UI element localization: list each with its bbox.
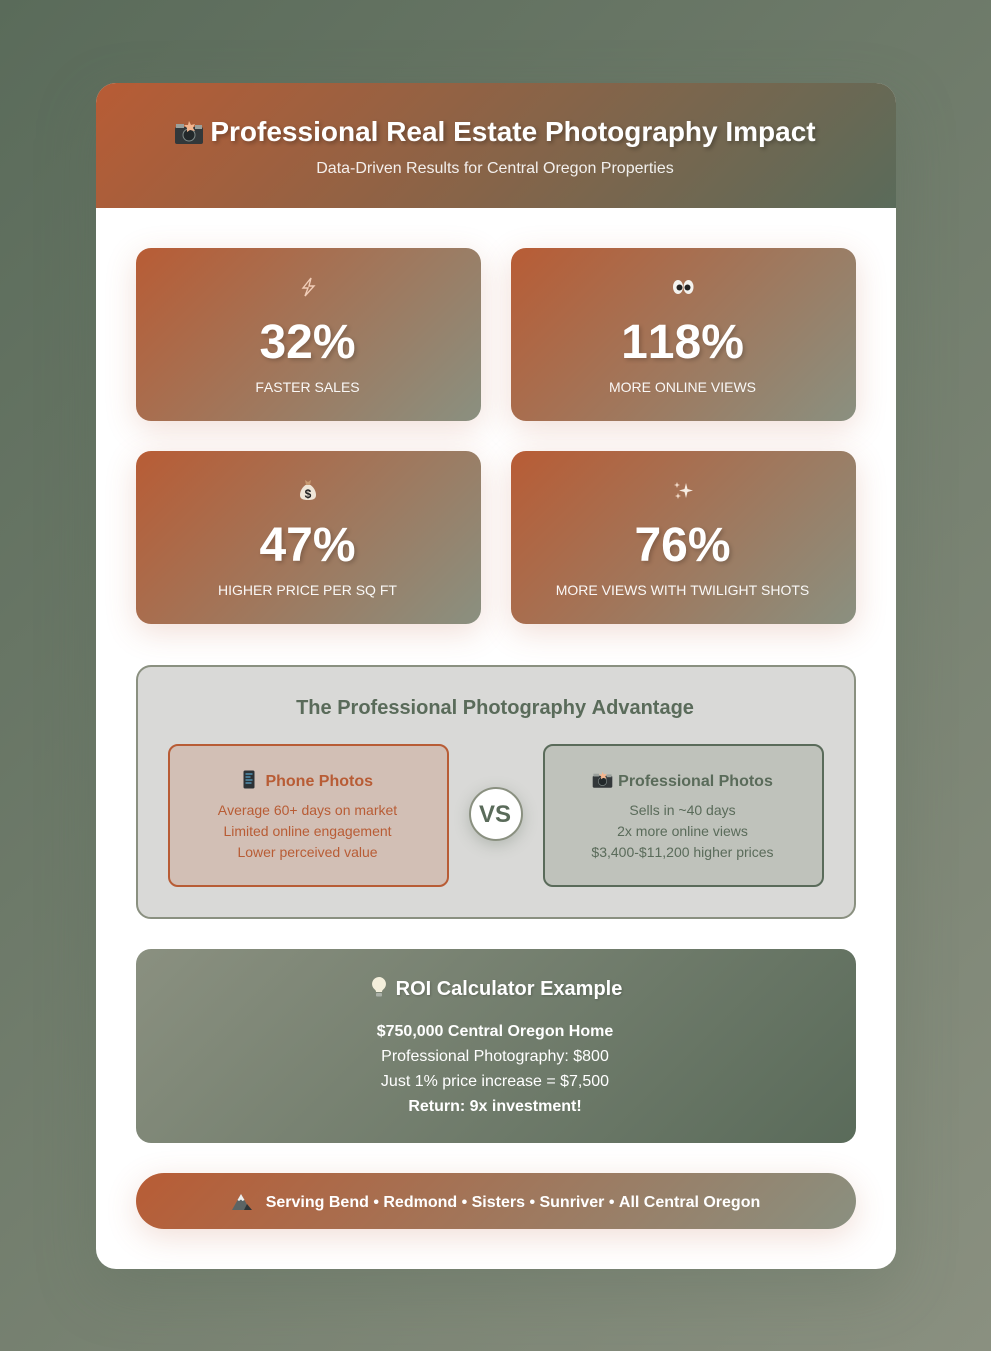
stat label: MORE VIEWS WITH TWILIGHT SHOTS [556, 582, 809, 598]
subtitle: Data-Driven Results for Central Oregon Properties [316, 160, 674, 177]
panel: comparison [136, 665, 856, 919]
phone details: Average 60+ days on market [218, 802, 397, 818]
stat card: online views [511, 248, 856, 421]
icon: lightning [302, 278, 316, 296]
stat card: faster sales [136, 248, 481, 421]
professional details [591, 802, 774, 860]
vs badge [469, 787, 523, 841]
phone heading: Phone Photos [265, 773, 373, 790]
roi details: Return: 9x investment! [408, 1098, 582, 1115]
title: Professional Real Estate Photography Impact [210, 116, 816, 147]
footer banner [136, 1173, 856, 1229]
card background [96, 83, 896, 1269]
professional heading: Professional Photos [618, 773, 773, 790]
stat number: 76% [634, 519, 731, 572]
stat label: MORE ONLINE VIEWS [609, 379, 756, 395]
stat number: 47% [259, 519, 356, 572]
header [96, 83, 896, 208]
footer banner: Serving Bend • Redmond • Sisters • Sunriver • All Central Oregon [266, 1194, 760, 1211]
icon: money bag: $ [304, 487, 311, 501]
stat card: price per sq ft [136, 451, 481, 624]
stat label: FASTER SALES [255, 379, 360, 395]
panel: roi calculator [136, 949, 856, 1143]
roi details: $750,000 Central Oregon Home [377, 1023, 613, 1040]
professional details: Sells in ~40 days [629, 802, 736, 818]
comparison heading: The Professional Photography Advantage [296, 697, 694, 719]
roi details: Professional Photography: $800 [381, 1048, 609, 1065]
icon: sparkles [674, 482, 693, 499]
phone details [218, 802, 398, 860]
stat label: HIGHER PRICE PER SQ FT [218, 582, 397, 598]
professional details: 2x more online views [617, 823, 748, 839]
stat card: twilight views [511, 451, 856, 624]
professional details: $3,400-$11,200 higher prices [591, 844, 774, 860]
phone details: Lower perceived value [237, 844, 378, 860]
icon: money bag [300, 480, 316, 501]
roi heading: ROI Calculator Example [396, 978, 622, 1000]
roi details: Just 1% price increase = $7,500 [381, 1073, 609, 1090]
stat number: 32% [259, 316, 356, 369]
vs badge: VS [479, 801, 511, 828]
panel: professional photos [543, 744, 824, 887]
roi details [377, 1023, 613, 1115]
panel: phone photos [168, 744, 449, 887]
stat number: 118% [621, 316, 744, 369]
icon: eyes [673, 280, 694, 294]
phone details: Limited online engagement [223, 823, 392, 839]
